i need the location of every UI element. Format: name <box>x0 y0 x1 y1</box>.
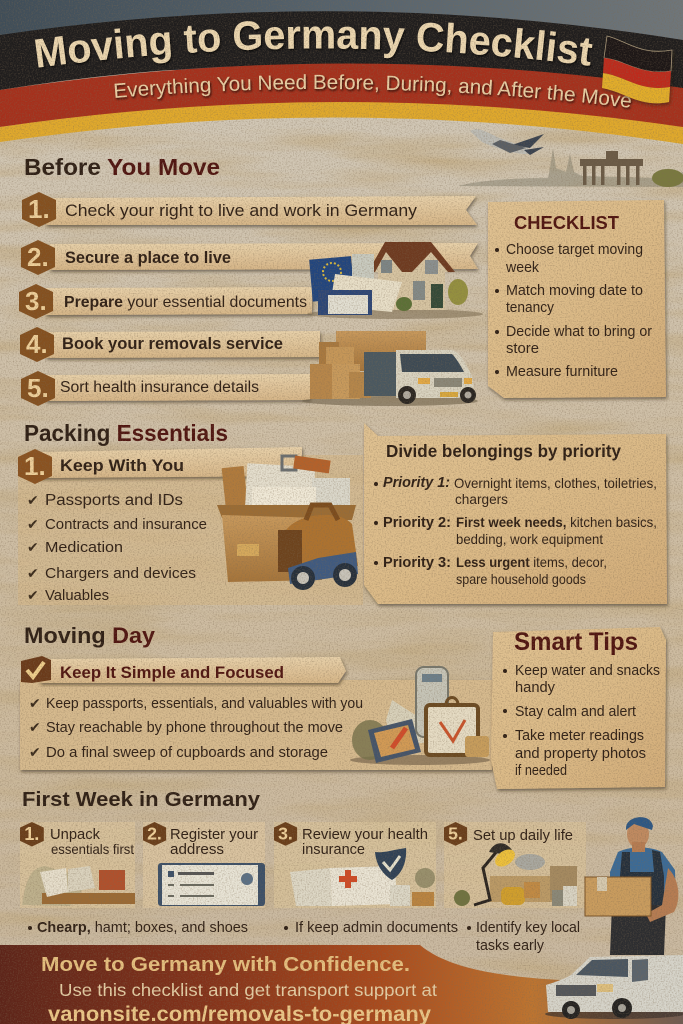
label: Check your right to live and work in Germany <box>65 202 418 220</box>
blue cart <box>288 552 358 584</box>
ribbon <box>46 196 477 225</box>
card 5: Set up daily life <box>473 828 573 844</box>
folder <box>318 290 372 315</box>
tips: if needed <box>515 763 567 779</box>
badge: 1. <box>24 824 39 844</box>
illustration: documents and house <box>307 242 483 319</box>
card 1 <box>20 822 135 908</box>
plane <box>470 129 544 155</box>
Brandenburg Gate <box>580 151 643 185</box>
heading: Divide belongings by priority <box>386 441 621 461</box>
EU passport <box>309 256 355 302</box>
items: week <box>505 260 540 276</box>
badge <box>18 449 52 484</box>
items: Keep passports, essentials, and valuables with you <box>46 696 363 712</box>
label: Keep With You <box>60 456 184 475</box>
panel: divide belongings by priority <box>364 423 667 604</box>
sky strip <box>0 0 683 70</box>
step 2 <box>21 240 478 275</box>
ribbon <box>40 447 302 478</box>
checklist items: Chargers and devices <box>45 565 196 582</box>
step 4: Book your removals service <box>62 335 283 353</box>
checklist items: Passports and IDs <box>45 492 183 509</box>
orange item <box>282 456 296 470</box>
checklist items: ✔ <box>27 566 39 582</box>
section: Before You Move <box>19 154 666 406</box>
heading: CHECKLIST <box>514 213 619 233</box>
step 4 <box>20 327 320 362</box>
priority 3: Less urgent items, decor, <box>456 554 607 570</box>
checklist items: Valuables <box>45 587 109 604</box>
bullet note 1: Chearp, hamt; boxes, and shoes <box>37 919 248 936</box>
tips: and property photos <box>515 746 646 762</box>
step 4: 4. <box>26 329 48 359</box>
bullet note 3: tasks early <box>476 937 544 954</box>
bullet note 3: Identify key local <box>476 919 580 936</box>
cartons <box>336 331 426 371</box>
priority 2: First week needs, kitchen basics, <box>456 514 657 530</box>
step 3 <box>19 284 312 319</box>
items: tenancy <box>506 300 555 316</box>
heading: First Week in Germany <box>22 788 261 811</box>
cap <box>626 817 653 830</box>
checklist items: ✔ <box>27 493 39 509</box>
checklist items: Medication <box>45 539 123 556</box>
badge: 1. <box>28 194 50 224</box>
items: store <box>506 341 539 357</box>
tips: Take meter readings <box>515 728 644 744</box>
card 2: Register your <box>170 827 258 843</box>
icon: check badge <box>21 656 51 683</box>
overall bib <box>616 850 664 905</box>
heading: Packing Essentials <box>24 420 228 446</box>
illustration: boxes and van <box>302 331 478 406</box>
bullet note 2: If keep admin documents <box>295 919 458 936</box>
illustration: moving day kit <box>350 667 490 765</box>
tips: handy <box>515 680 556 696</box>
box <box>585 877 651 916</box>
badge <box>22 192 56 227</box>
card 5: 5. <box>448 824 463 844</box>
checklist items: ✔ <box>27 588 39 604</box>
call to action line: Use this checklist and get transport support at <box>59 980 437 1000</box>
illustration: packed box <box>217 456 358 590</box>
heading: Moving Day <box>24 623 156 648</box>
illustration: insurance booklet and shield <box>290 848 435 906</box>
checklist items: Contracts and insurance <box>45 516 207 533</box>
items: Choose target moving <box>506 242 643 258</box>
step 5: Sort health insurance details <box>60 379 259 396</box>
items: Decide what to bring or <box>506 324 652 340</box>
card 2 <box>143 822 265 908</box>
panel: keep with you <box>18 447 363 605</box>
items: Match moving date to <box>506 283 643 299</box>
priority 1: Priority 1: <box>383 474 450 491</box>
ribbon <box>40 657 346 683</box>
items: Stay reachable by phone throughout the move <box>46 720 343 736</box>
heading: Before You Move <box>24 154 220 180</box>
gold stripe <box>0 102 683 144</box>
items <box>495 242 652 380</box>
priority 2 <box>374 514 657 547</box>
items: ✔ <box>29 720 41 736</box>
legs <box>610 905 666 955</box>
house <box>378 270 445 310</box>
letter <box>330 274 402 312</box>
title: Moving to Germany Checklist <box>35 21 594 69</box>
header banner <box>0 0 683 144</box>
checklist items: ✔ <box>27 540 39 556</box>
card 3: Review your health <box>302 827 428 843</box>
priority 1 <box>374 474 657 507</box>
priority 2: Priority 2: <box>383 514 451 531</box>
section: Moving Day <box>20 623 666 789</box>
black stripe <box>0 11 683 100</box>
satchel <box>286 515 358 574</box>
right arm <box>646 868 678 922</box>
card 3: insurance <box>302 842 365 858</box>
card 2: 2. <box>147 824 162 844</box>
tips: Stay calm and alert <box>515 704 636 720</box>
bullet note 3 <box>467 919 580 954</box>
trees <box>652 169 683 187</box>
step 2: Secure a place to live <box>65 249 231 267</box>
call to action headline: Move to Germany with Confidence. <box>41 954 410 976</box>
items: ✔ <box>29 745 41 761</box>
carton <box>217 505 356 520</box>
badge: 1. <box>24 451 46 481</box>
illustration: registration form <box>158 863 265 906</box>
icon: airplane and skyline <box>458 129 683 187</box>
step 1 <box>22 192 477 227</box>
label: Unpack <box>50 827 101 843</box>
tips: Keep water and snacks <box>515 663 660 679</box>
items <box>29 696 363 761</box>
step 5: 5. <box>27 373 49 403</box>
section: First Week in Germany <box>20 788 586 954</box>
card 1: essentials first <box>51 841 134 857</box>
torso <box>610 848 676 905</box>
heading: Smart Tips <box>514 628 638 656</box>
panel: keep it simple <box>20 656 492 770</box>
priority 1: chargers <box>455 492 508 507</box>
van body <box>364 352 398 396</box>
items: ✔ <box>29 696 41 712</box>
card 3 <box>274 822 436 908</box>
step 2: 2. <box>27 242 49 272</box>
illustration: book <box>22 866 135 906</box>
step 3: Prepare your essential documents <box>64 294 307 311</box>
illustration: lamp and desk items <box>454 843 577 906</box>
folder <box>222 466 249 518</box>
red stripe <box>0 63 683 128</box>
checklist items <box>27 492 207 604</box>
panel: checklist <box>488 200 666 398</box>
tips <box>503 663 660 779</box>
subtitle: Everything You Need Before, During, and After the Move <box>114 74 633 110</box>
skyline silhouette <box>458 148 683 187</box>
panel: smart tips <box>491 627 666 789</box>
priority 3: spare household goods <box>456 571 586 587</box>
step 3: 3. <box>25 286 47 316</box>
items: Do a final sweep of cupboards and storage <box>46 745 328 761</box>
section: Packing Essentials <box>18 420 667 605</box>
illustration: mover with box <box>585 817 678 955</box>
priority 3 <box>374 554 607 587</box>
items: Measure furniture <box>506 364 618 380</box>
priority 3: Priority 3: <box>383 554 451 571</box>
papers <box>245 463 315 519</box>
card 3: 3. <box>278 824 293 844</box>
card 5 <box>444 822 586 908</box>
icon: German flag <box>602 36 672 103</box>
card 2: address <box>170 842 224 858</box>
head <box>627 820 649 848</box>
step 5 <box>21 371 310 406</box>
priority 1: Overnight items, clothes, toiletries, <box>454 475 657 491</box>
footer banner <box>0 945 683 1024</box>
label: Keep It Simple and Focused <box>60 664 284 682</box>
illustration: white van <box>545 955 683 1019</box>
checklist items: ✔ <box>27 517 39 533</box>
priority 2: bedding, work equipment <box>456 531 603 547</box>
